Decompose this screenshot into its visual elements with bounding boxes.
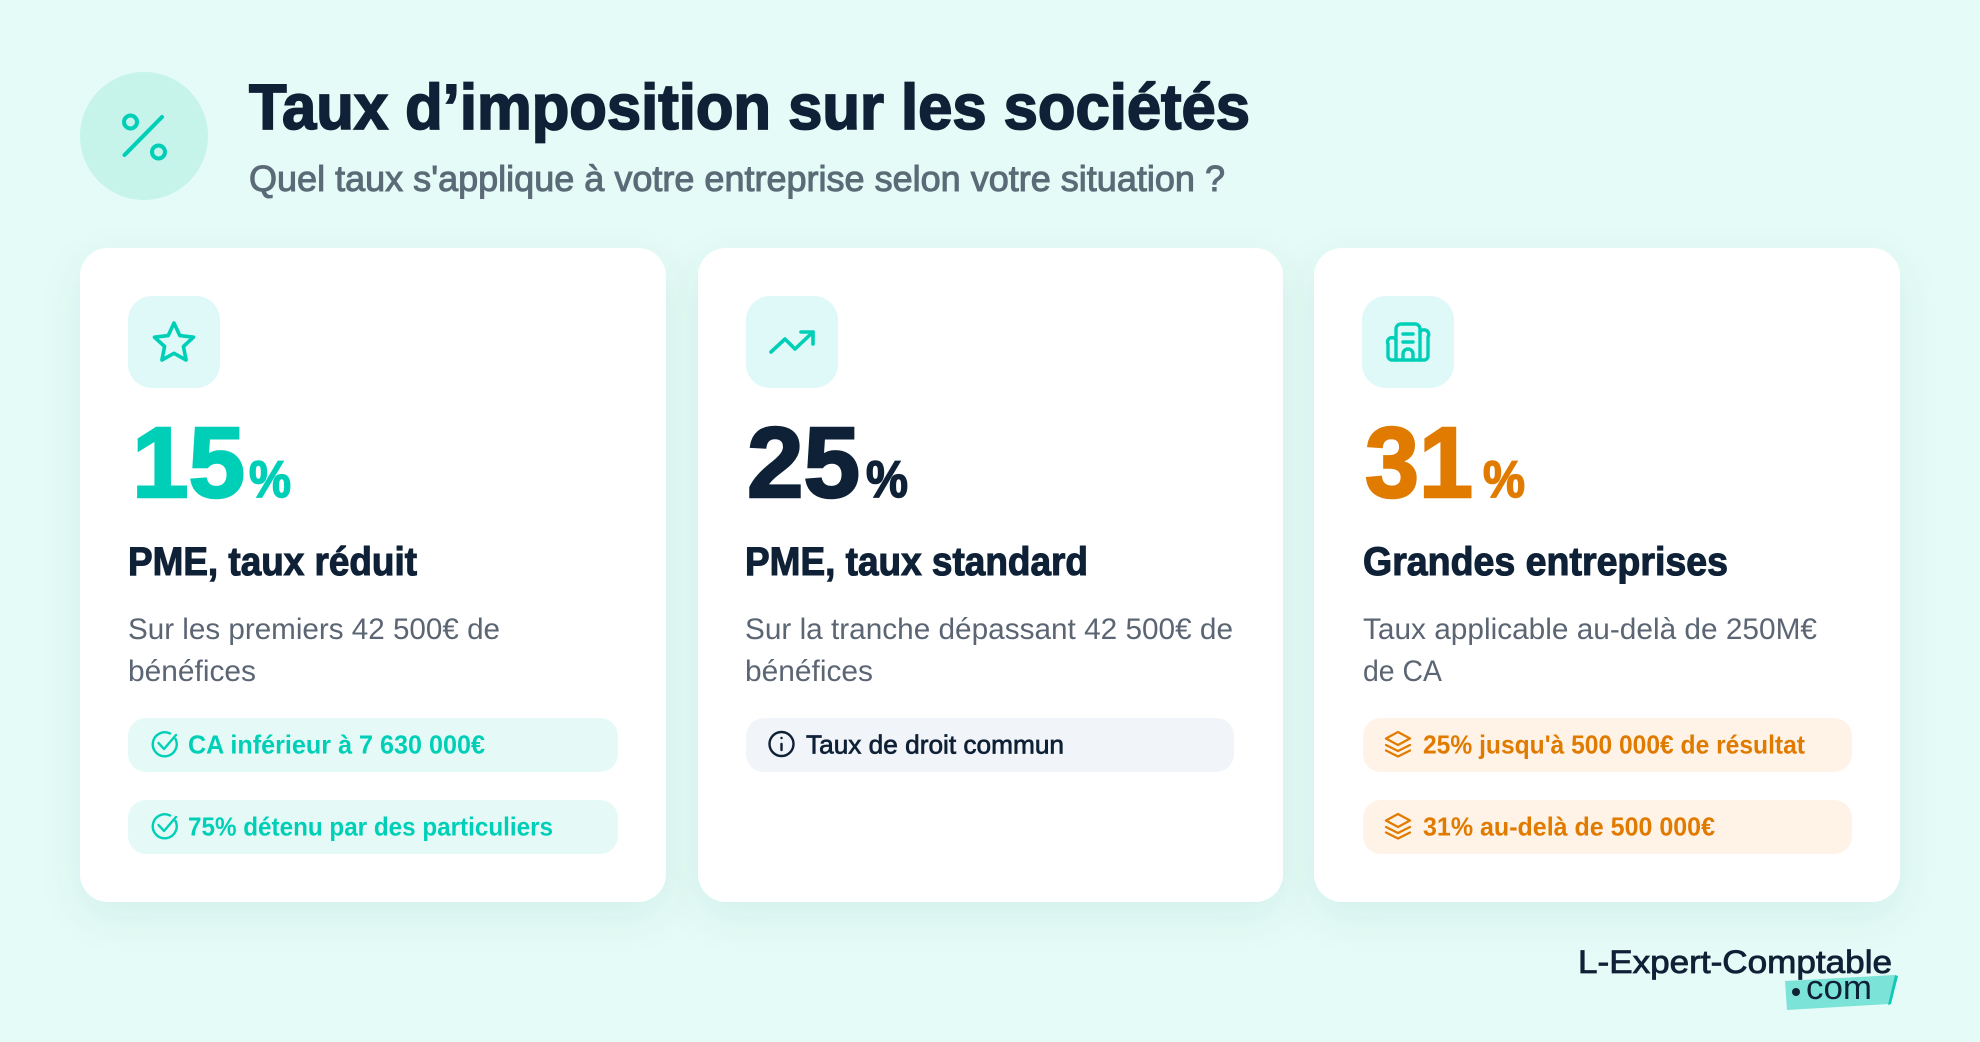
pill: 25%: 25% jusqu'à 500 000€ de résultat bbox=[1423, 730, 1805, 760]
panel: Grandes entreprises bbox=[1314, 248, 1900, 902]
subtitle: Quel taux s'applique à votre entreprise selon votre situation ? bbox=[249, 158, 1225, 199]
description: de CA bbox=[1363, 655, 1442, 688]
description: bénéfices bbox=[128, 655, 256, 688]
rate 25%: % bbox=[866, 451, 908, 509]
title: Taux d’imposition sur les sociétés bbox=[249, 71, 1250, 143]
description bbox=[745, 613, 1233, 688]
rate 15% bbox=[132, 407, 291, 519]
rate 25% bbox=[747, 407, 908, 519]
icon: star bbox=[128, 296, 220, 388]
rate 31%: 31 bbox=[1365, 407, 1473, 519]
pill: CA: CA inférieur à 7 630 000€ bbox=[188, 730, 485, 760]
logo: L-Expert-Comptable.com: L-Expert-Comptable bbox=[1578, 944, 1892, 980]
heading: Grandes entreprises bbox=[1363, 540, 1728, 584]
description: Sur les premiers 42 500€ de bbox=[128, 613, 500, 646]
pill: particuliers bbox=[128, 800, 618, 854]
icon: percent badge bbox=[80, 72, 208, 200]
icon: trend bbox=[746, 296, 838, 388]
panel: PME taux standard bbox=[698, 248, 1283, 902]
icon: building bbox=[1362, 296, 1454, 388]
pill: particuliers: 75% détenu par des particuliers bbox=[188, 812, 553, 842]
logo: L-Expert-Comptable.com bbox=[1578, 944, 1898, 1010]
pill: 31%: 31% au-delà de 500 000€ bbox=[1423, 812, 1715, 842]
rate 15%: % bbox=[249, 451, 291, 509]
description bbox=[1363, 613, 1817, 688]
pill: 25% bbox=[1363, 718, 1852, 772]
heading: PME, taux standard bbox=[745, 540, 1088, 584]
logo: L-Expert-Comptable.com: com bbox=[1806, 969, 1872, 1007]
heading: PME, taux réduit bbox=[128, 540, 417, 584]
rate 31% bbox=[1365, 407, 1525, 519]
description: bénéfices bbox=[745, 655, 873, 688]
description bbox=[128, 613, 500, 688]
pill: droit commun bbox=[746, 718, 1234, 772]
rate 25%: 25 bbox=[747, 407, 860, 519]
rate 31%: % bbox=[1483, 451, 1525, 509]
description: Taux applicable au-delà de 250M€ bbox=[1363, 613, 1817, 646]
rate 15%: 15 bbox=[132, 407, 245, 519]
pill: droit commun: Taux de droit commun bbox=[806, 730, 1064, 760]
description: Sur la tranche dépassant 42 500€ de bbox=[745, 613, 1233, 646]
pill: 31% bbox=[1363, 800, 1852, 854]
pill: CA bbox=[128, 718, 618, 772]
panel: PME taux réduit bbox=[80, 248, 666, 902]
